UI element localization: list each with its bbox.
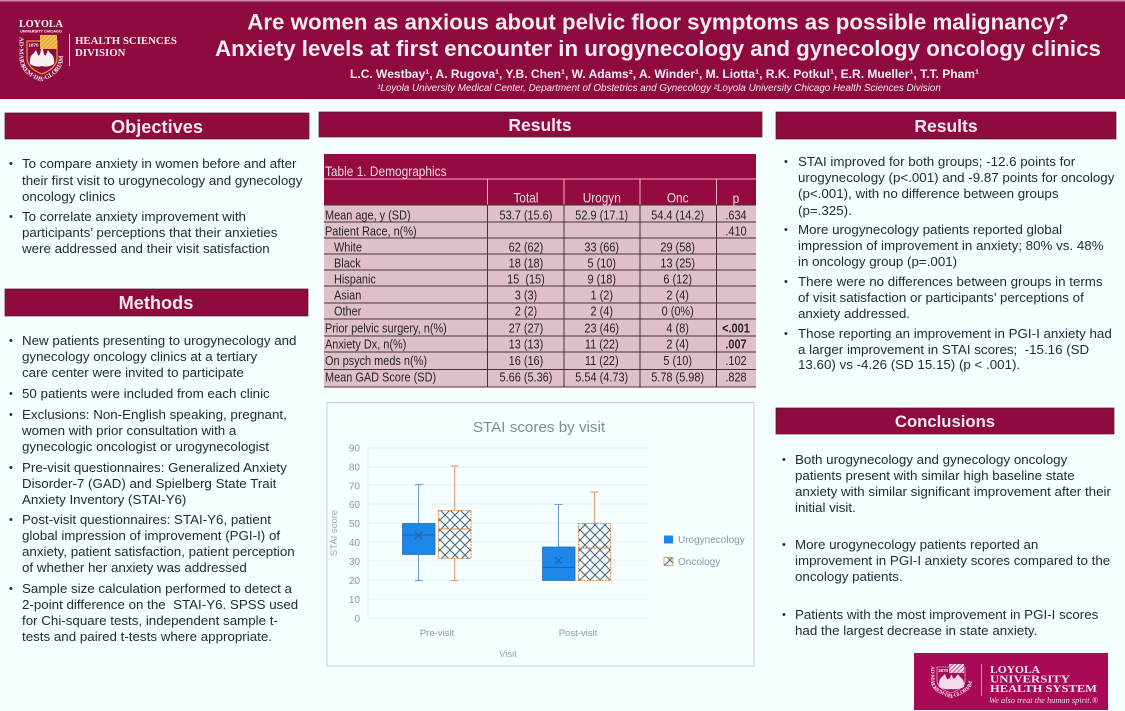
text block: methods bullets: Pre-visit questionnaires: Generalized Anxiety xyxy=(22,460,287,475)
text block: methods bullets: • xyxy=(9,514,13,526)
table: demographics: 2 (4) xyxy=(666,289,689,302)
logo: Loyola University Health System: 1870 xyxy=(938,668,949,673)
text block: results bullets: urogynecology (p<.001) and -9.87 points for oncology xyxy=(798,170,1115,185)
text block: methods bullets: women with prior consultation with a xyxy=(21,423,237,438)
text block: methods bullets: • xyxy=(9,388,13,400)
table: demographics: Mean age, y (SD) xyxy=(325,209,411,222)
logo: Loyola Health Sciences Division xyxy=(19,19,177,82)
text block: results bullets: anxiety addressed. xyxy=(798,306,910,321)
table: demographics: 9 (18) xyxy=(587,273,616,286)
text block: methods bullets: • xyxy=(9,335,13,347)
text block: results bullets: There were no differences between groups in terms xyxy=(798,274,1103,289)
table: demographics: 1 (2) xyxy=(590,289,613,302)
table: demographics: .828 xyxy=(725,371,747,385)
y axis title: STAI score xyxy=(329,510,340,556)
text block: conclusions bullets: anxiety with similar significant improvement after their xyxy=(795,484,1111,499)
y axis labels: 40 xyxy=(349,538,360,549)
logo: Loyola Health Sciences Division: LOYOLA xyxy=(19,19,63,30)
text block: results bullets: STAI improved for both groups; -12.6 points for xyxy=(798,154,1076,169)
text block: objectives bullets: • xyxy=(9,158,13,170)
table: demographics: <.001 xyxy=(722,322,750,336)
text block: objectives bullets: their first visit to urogynecology and gynecology xyxy=(22,173,303,188)
y axis labels: 10 xyxy=(349,595,360,606)
legend: Oncology xyxy=(678,557,720,568)
text block: conclusions bullets: • xyxy=(782,609,786,621)
table: demographics: 16 (16) xyxy=(509,354,543,368)
panel: methods xyxy=(5,289,308,644)
table: demographics: 3 (3) xyxy=(515,289,537,302)
x axis labels: Post-visit xyxy=(559,628,598,639)
table: demographics: 52.9 (17.1) xyxy=(575,209,628,222)
text block: methods bullets: of whether her anxiety was addressed xyxy=(22,560,247,575)
table: demographics: .634 xyxy=(725,209,747,222)
text block: methods bullets: 50 patients were included from each clinic xyxy=(22,386,270,401)
chart: STAI scores by visit box plot xyxy=(327,402,754,666)
panel: conclusions xyxy=(776,408,1114,638)
box: urogynecology pre-visit xyxy=(402,484,435,580)
y axis labels: 90 xyxy=(349,444,360,454)
text block: objectives bullets: To correlate anxiety improvement with xyxy=(22,209,246,224)
table: demographics: 15 (15) xyxy=(507,273,545,286)
table: demographics: Patient Race, n(%) xyxy=(325,225,417,239)
heading: results right: Results xyxy=(914,116,978,136)
box: oncology post-visit xyxy=(578,492,610,580)
legend: Urogynecology xyxy=(678,535,745,546)
panel: results right xyxy=(776,112,1116,372)
x axis labels: Pre-visit xyxy=(420,628,455,639)
panel: objectives xyxy=(5,113,309,256)
table: demographics: 18 (18) xyxy=(509,257,543,270)
text block: methods bullets: gynecology oncology clinics at a tertiary xyxy=(22,349,257,364)
table: demographics: Black xyxy=(334,257,361,270)
table: demographics: .410 xyxy=(725,225,747,239)
table: demographics: 5 (10) xyxy=(587,257,616,270)
text block: results bullets: in oncology group (p=.001) xyxy=(798,254,957,269)
logo: Loyola Health Sciences Division: 1870 xyxy=(28,42,39,48)
text block: conclusions bullets: patients present with similar high baseline state xyxy=(795,468,1075,483)
logo: Loyola University Health System: AD·MAIOREM·DEI·GLORIAM xyxy=(931,666,972,698)
text block: results bullets: • xyxy=(784,328,788,340)
table: demographics xyxy=(324,154,756,387)
table: demographics: 13 (13) xyxy=(509,338,543,351)
table: demographics: Total xyxy=(513,191,538,206)
box: oncology pre-visit xyxy=(438,466,471,580)
text block: methods bullets: global impression of improvement (PGI-I) of xyxy=(22,528,280,543)
text block: methods bullets: tests and paired t-tests where appropriate. xyxy=(22,629,272,644)
text block: results bullets: of visit satisfaction or participants’ perceptions of xyxy=(798,290,1084,305)
table: demographics: 11 (22) xyxy=(585,338,619,351)
table: demographics: 2 (4) xyxy=(590,305,613,318)
text block: objectives bullets: oncology clinics xyxy=(22,189,116,204)
heading: results right xyxy=(776,112,1116,139)
text block: conclusions bullets: had the largest decrease in state anxiety. xyxy=(795,623,1037,638)
text block: methods bullets: for Chi-square tests, independent sample t- xyxy=(22,613,278,628)
text block: methods bullets: New patients presenting to urogynecology and xyxy=(22,333,296,348)
header banner xyxy=(0,0,1125,99)
text block: results bullets: (p=.325). xyxy=(798,203,852,218)
table: demographics: Table 1. Demographics xyxy=(325,163,447,179)
text block: methods bullets: Anxiety Inventory (STAI-Y6) xyxy=(22,492,186,507)
text block: results bullets: a larger improvement in STAI scores; -15.16 (SD xyxy=(798,342,1089,357)
title: Are women as anxious about pelvic floor symptoms as possible malignancy? xyxy=(247,10,1069,34)
y axis labels: 20 xyxy=(349,576,360,587)
table: demographics: 53.7 (15.6) xyxy=(500,209,552,222)
table: demographics: 0 (0%) xyxy=(662,305,694,318)
table: demographics: 54.4 (14.2) xyxy=(651,209,704,222)
text block: results bullets: • xyxy=(784,276,788,288)
y axis labels: 0 xyxy=(354,614,360,625)
table: demographics: Onc xyxy=(667,191,689,206)
table: demographics: 4 (8) xyxy=(666,322,689,336)
heading: results center xyxy=(319,112,762,137)
text block: conclusions bullets: • xyxy=(782,454,786,466)
table: demographics: Urogyn xyxy=(583,191,621,206)
y axis labels: 50 xyxy=(349,519,360,530)
heading: methods xyxy=(5,289,308,316)
table: demographics: .102 xyxy=(725,354,747,368)
table: demographics: 5.78 (5.98) xyxy=(651,371,704,385)
table: demographics: .007 xyxy=(725,338,747,351)
table: demographics: 29 (58) xyxy=(660,241,695,254)
text block: methods bullets: • xyxy=(9,462,13,474)
box: urogynecology post-visit xyxy=(542,504,575,580)
logo: Loyola University Health System: HEALTH SYSTEM xyxy=(990,683,1098,695)
heading: methods: Methods xyxy=(119,293,193,313)
text block: methods bullets: gynecologic oncologist or urogynecologist xyxy=(22,439,269,454)
text block: objectives bullets: were addressed and their visit satisfaction xyxy=(21,241,270,256)
logo: Loyola Health Sciences Division: AD·MAIOREM·DEI·GLORIAM xyxy=(20,37,64,82)
text block: objectives bullets: To compare anxiety in women before and after xyxy=(22,156,297,171)
text block: results bullets: impression of improvement in anxiety; 80% vs. 48% xyxy=(798,238,1104,253)
text block: objectives bullets xyxy=(9,156,303,256)
logo: Loyola University Health System xyxy=(914,653,1108,710)
text block: results bullets: • xyxy=(784,156,788,168)
text block: results bullets: More urogynecology patients reported global xyxy=(798,222,1062,237)
x axis labels xyxy=(420,628,598,639)
text block: methods bullets: anxiety, patient satisfaction, patient perception xyxy=(22,544,295,559)
logo: Loyola Health Sciences Division: DIVISION xyxy=(75,47,126,59)
text block: objectives bullets: participants’ perceptions that their anxieties xyxy=(22,225,278,240)
x axis title: Visit xyxy=(499,649,517,660)
table: demographics: Hispanic xyxy=(334,273,376,286)
text block: methods bullets: Post-visit questionnaires: STAI-Y6, patient xyxy=(22,512,271,527)
logo: Loyola Health Sciences Division: HEALTH SCIENCES xyxy=(75,35,177,47)
text block: conclusions bullets: • xyxy=(782,539,786,551)
table: demographics: 6 (12) xyxy=(663,273,692,286)
text block: methods bullets: Sample size calculation performed to detect a xyxy=(22,581,293,596)
affiliations: ¹Loyola University Medical Center, Department of Obstetrics and Gynecology ²Loyola University Chicago Health Sciences Division xyxy=(377,83,941,94)
text block: methods bullets: • xyxy=(9,583,13,595)
text block: conclusions bullets: Patients with the most improvement in PGI-I scores xyxy=(795,607,1099,622)
text block: methods bullets xyxy=(9,333,298,644)
logo: Loyola University Health System: UNIVERSITY xyxy=(990,674,1070,686)
table: demographics: 2 (4) xyxy=(666,338,689,351)
text block: conclusions bullets: More urogynecology patients reported an xyxy=(795,537,1038,552)
table: demographics: Anxiety Dx, n(%) xyxy=(325,338,406,351)
text block: objectives bullets: • xyxy=(9,211,13,223)
table: demographics: 13 (25) xyxy=(660,257,695,270)
text block: methods bullets: Disorder-7 (GAD) and Spielberg State Trait xyxy=(22,476,277,491)
text block: results bullets: Those reporting an improvement in PGI-I anxiety had xyxy=(798,326,1112,341)
legend xyxy=(664,535,745,568)
text block: results bullets: 13.60) vs -4.26 (SD 15.15) (p < .001). xyxy=(798,357,1020,372)
heading: objectives: Objectives xyxy=(111,117,203,137)
logo: Loyola University Health System: LOYOLA xyxy=(990,664,1040,676)
chart title: STAI scores by visit xyxy=(473,419,606,436)
text block: methods bullets: 2-point difference on the STAI-Y6. SPSS used xyxy=(22,597,298,612)
y axis labels xyxy=(349,444,360,625)
table: demographics: 5.66 (5.36) xyxy=(500,371,552,385)
text block: methods bullets: Exclusions: Non-English speaking, pregnant, xyxy=(22,407,287,422)
text block: methods bullets: • xyxy=(9,409,13,421)
text block: results bullets: (p<.001), with no difference between groups xyxy=(798,186,1059,201)
y axis labels: 30 xyxy=(349,557,360,568)
text block: conclusions bullets: improvement in PGI-I anxiety scores compared to the xyxy=(795,553,1110,568)
text block: conclusions bullets: initial visit. xyxy=(795,500,856,515)
text block: results bullets: • xyxy=(784,224,788,236)
table: demographics: 5.54 (4.73) xyxy=(575,371,628,385)
table: demographics: On psych meds n(%) xyxy=(325,354,427,368)
title xyxy=(215,10,1101,61)
heading: conclusions xyxy=(776,408,1114,434)
authors: L.C. Westbay¹, A. Rugova¹, Y.B. Chen¹, W. Adams², A. Winder¹, M. Liotta¹, R.K. Potkul¹, E.R. Mueller¹, T.T. Pham¹ xyxy=(350,67,979,81)
logo: Loyola University Health System: We also treat the human spirit.® xyxy=(989,696,1099,705)
heading: results center: Results xyxy=(508,115,572,135)
table: demographics: 11 (22) xyxy=(585,354,619,368)
table: demographics: 5 (10) xyxy=(663,354,692,368)
table: demographics: 23 (46) xyxy=(584,322,619,336)
table: demographics: Prior pelvic surgery, n(%) xyxy=(325,322,447,336)
table: demographics: 27 (27) xyxy=(509,322,543,336)
table: demographics: White xyxy=(334,241,362,254)
title: Anxiety levels at first encounter in urogynecology and gynecology oncology clinics xyxy=(215,36,1101,61)
table: demographics: Mean GAD Score (SD) xyxy=(325,371,436,385)
heading: conclusions: Conclusions xyxy=(895,412,995,431)
y axis labels: 80 xyxy=(349,462,360,474)
logo: Loyola Health Sciences Division: UNIVERSITY CHICAGO xyxy=(20,30,62,34)
text block: methods bullets: care center were invited to participate xyxy=(22,365,244,380)
table: demographics: p xyxy=(733,191,739,206)
text block: conclusions bullets: Both urogynecology and gynecology oncology xyxy=(795,452,1068,467)
table: demographics: Asian xyxy=(334,289,361,302)
text block: conclusions bullets: oncology patients. xyxy=(795,569,903,584)
table: demographics: 33 (66) xyxy=(584,241,619,254)
table: demographics: 2 (2) xyxy=(515,305,537,318)
text block: conclusions bullets xyxy=(782,452,1111,638)
text block: results bullets xyxy=(784,154,1115,372)
heading: objectives xyxy=(5,113,309,139)
y axis labels: 70 xyxy=(349,482,360,492)
table: demographics: 62 (62) xyxy=(509,241,543,254)
table: demographics: Other xyxy=(334,305,361,318)
y axis labels: 60 xyxy=(349,500,360,511)
